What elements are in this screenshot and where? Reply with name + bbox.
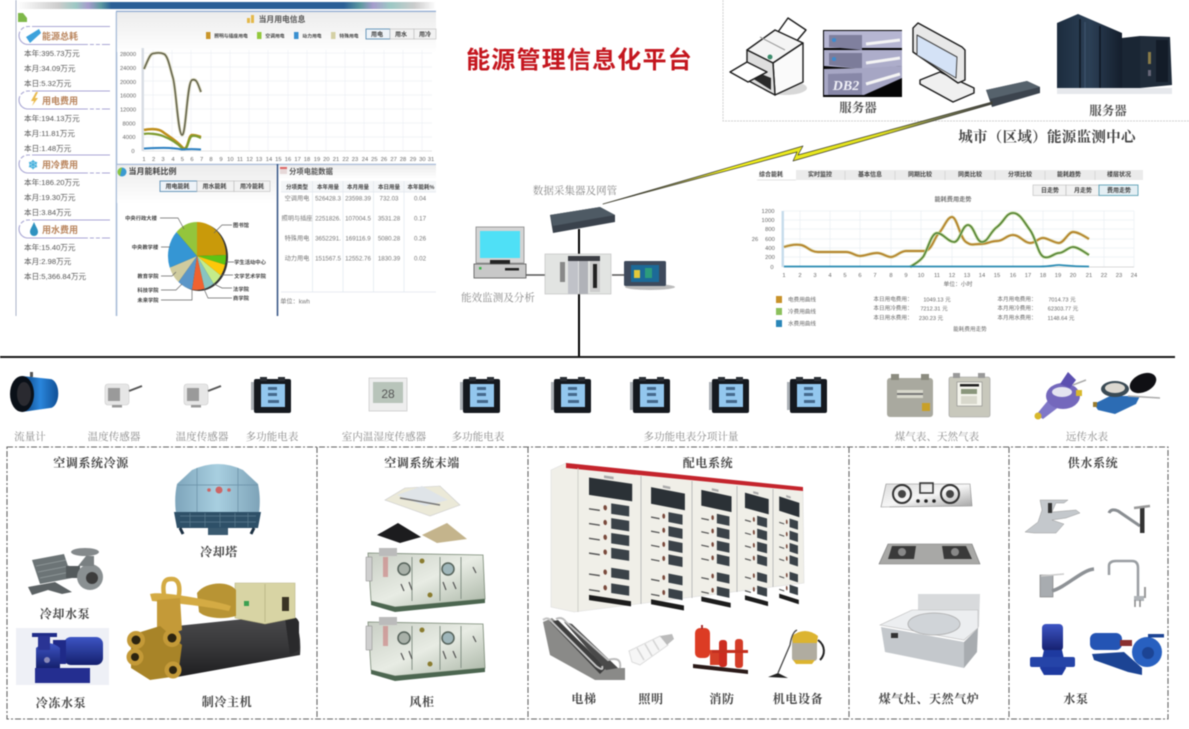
icon: two burner stove xyxy=(879,544,980,564)
panel: energy dashboard xyxy=(16,0,436,316)
tab bar: 楼层状况 xyxy=(1107,170,1131,178)
heading: sub-item electricity data: 分项电能数据 xyxy=(289,167,333,176)
data table: 空调用电 xyxy=(285,194,309,202)
line chart: cost trend: 5 xyxy=(843,273,847,279)
dashboard top strip xyxy=(17,2,436,9)
line chart: monthly electricity: 15 xyxy=(275,157,282,163)
sensor labels: 流量计 xyxy=(14,430,46,443)
line chart: cost trend: 单位：小时 xyxy=(944,280,973,288)
data table: 本日用量 xyxy=(378,183,400,191)
icon: chilled water pump xyxy=(16,628,109,685)
line chart: cost trend: 18 xyxy=(1040,273,1046,279)
data table: 5080.28 xyxy=(378,236,401,242)
line chart: monthly electricity: 12000 xyxy=(120,108,136,114)
icon: air handling unit xyxy=(366,548,485,612)
line chart: cost trend: 23 xyxy=(1116,273,1122,279)
title: 能源管理信息化平台 xyxy=(466,46,693,74)
line chart: monthly electricity: 28000 xyxy=(120,52,136,58)
line chart: monthly electricity: 6 xyxy=(190,157,194,163)
tab bar: 同期比较 xyxy=(908,170,932,178)
cost statistics: 本月用冷费用： xyxy=(997,304,1037,312)
pie chart: energy ratio: 科技学院 xyxy=(137,286,159,294)
line chart: monthly electricity: 20000 xyxy=(120,80,136,86)
icon: power meter 6 xyxy=(787,377,827,413)
line chart: monthly electricity: 9 xyxy=(219,157,223,163)
icon: room humidity sensor xyxy=(369,378,407,411)
summary: electricity cost xyxy=(19,91,110,153)
tab bar: 综合能耗 xyxy=(759,170,783,178)
tab buttons: electricity water cooling: 用水 xyxy=(395,30,407,38)
icon: three burner stove xyxy=(881,483,972,507)
trend buttons: 月走势 xyxy=(1074,186,1092,194)
summary: cooling cost: 本年:186.20万元 xyxy=(24,177,80,187)
tab buttons: ratio: 用冷能耗 xyxy=(240,182,264,190)
line chart: cost trend: 16 xyxy=(1010,273,1016,279)
data table: 0.04 xyxy=(414,196,427,202)
data table: 526428.3 xyxy=(315,196,341,202)
cost statistics: 230.23 元 xyxy=(919,315,944,322)
icon: monitor xyxy=(913,23,974,102)
data table xyxy=(281,181,436,292)
label: efficiency monitoring and analysis: 能效监测及分析 xyxy=(461,291,535,304)
icon: power meter 3 xyxy=(551,377,591,413)
icon: temperature sensor xyxy=(105,384,142,408)
switchgear cabinets xyxy=(551,463,804,612)
data table: 本年用量 xyxy=(317,183,339,191)
heading: 配电系统 xyxy=(683,455,734,470)
heading: 空调系统末端 xyxy=(384,455,460,470)
arrow: wireless link lightning xyxy=(603,102,992,204)
data table: 732.03 xyxy=(380,196,399,202)
summary: cooling cost: 用冷费用 xyxy=(42,159,78,170)
line chart: cost trend: 1 xyxy=(782,273,786,279)
cost statistics: 本日用水费用： xyxy=(873,314,913,322)
panel: AC terminal xyxy=(366,455,485,709)
cost statistics: 7212.31 元 xyxy=(920,306,948,312)
cost statistics: 7014.73 元 xyxy=(1048,296,1076,304)
pie chart: energy ratio: 文学艺术学院 xyxy=(234,272,267,280)
line chart: monthly electricity: 23 xyxy=(352,157,358,163)
summary: water cost: 本年:15.40万元 xyxy=(24,242,76,252)
icon: kitchen faucet xyxy=(1109,506,1150,533)
pie chart: energy ratio: 中央行政大楼 xyxy=(125,214,158,222)
sensor labels: 多功能电表分项计量 xyxy=(644,430,738,443)
icon: cooling tower xyxy=(174,464,261,535)
summary: total energy: 本日:5.32万元 xyxy=(24,78,72,88)
label: chiller unit: 制冷主机 xyxy=(202,694,252,709)
data table: 2251826. xyxy=(315,216,341,222)
tab bar: 同类比较 xyxy=(958,170,982,178)
icon: power meter 4 xyxy=(630,377,670,413)
summary: water cost: 本月:2.98万元 xyxy=(24,256,72,266)
icon: lever faucet xyxy=(1040,569,1094,597)
chart legend: 动力用电 xyxy=(302,32,322,40)
data table: 1830.39 xyxy=(378,256,401,262)
line chart: monthly electricity: 19 xyxy=(314,157,320,163)
label: data collector and gateway: 数据采集器及网管 xyxy=(533,184,618,197)
line chart: monthly electricity: 29 xyxy=(410,157,416,163)
line chart: monthly electricity: 28 xyxy=(400,157,406,163)
line chart: monthly electricity: 26 xyxy=(381,157,387,163)
cost legend xyxy=(776,296,816,328)
summary: water cost: 本日:5,366.84万元 xyxy=(24,271,86,281)
data table: 12552.76 xyxy=(345,256,371,262)
line chart: cost trend: 2 xyxy=(798,273,802,279)
line chart: cost trend: 4 xyxy=(828,273,832,279)
heading: monthly energy ratio xyxy=(118,166,176,176)
summary: electricity cost: 本月:11.81万元 xyxy=(24,128,75,138)
icon: horizontal water pump xyxy=(1090,633,1164,675)
cost statistics: 本月用电费用： xyxy=(997,295,1037,303)
data table: 0.26 xyxy=(414,236,427,242)
sensor labels: 煤气表、天然气表 xyxy=(895,430,980,443)
cost legend: 电费用曲线 xyxy=(788,296,816,304)
line chart: cost trend: 8 xyxy=(889,273,893,279)
line chart: monthly electricity: 20 xyxy=(323,157,330,163)
pie chart: energy ratio: 教育学院 xyxy=(137,272,159,280)
data table: 特殊用电 xyxy=(285,234,309,242)
data table: 本年能耗% xyxy=(408,183,435,191)
label: gas stove and furnace: 煤气灶、天然气炉 xyxy=(878,691,979,706)
icon: black cassette unit xyxy=(377,523,421,543)
summary: total energy: 能源总耗 xyxy=(42,30,78,42)
line chart: cost trend: 26 xyxy=(752,237,758,243)
cost statistics xyxy=(873,295,1079,333)
pie chart: energy ratio: 商学院 xyxy=(233,294,250,302)
line chart: monthly electricity: 1 xyxy=(142,157,146,163)
line chart: cost trend: 400 xyxy=(765,246,775,252)
heading: 空调系统冷源 xyxy=(53,455,129,470)
line chart: monthly electricity: 2 xyxy=(152,157,155,163)
line chart: cost trend: 9 xyxy=(904,273,908,279)
sidebar: energy summary xyxy=(19,26,110,281)
heading: monthly energy ratio: 当月能耗比例 xyxy=(128,166,176,176)
summary: electricity cost: 本年:194.13万元 xyxy=(24,113,80,123)
icon: temperature sensor 2 xyxy=(184,384,221,408)
line chart: monthly electricity: 24000 xyxy=(120,66,136,72)
summary: cooling cost xyxy=(19,155,110,217)
line chart: cost trend: 7 xyxy=(873,273,877,279)
tab bar: 分项比较 xyxy=(1008,170,1032,178)
line chart: cost trend: 200 xyxy=(765,255,775,261)
trend buttons: 日走势 xyxy=(1041,186,1059,194)
line chart: monthly electricity: 4000 xyxy=(123,135,135,141)
line chart: cost trend: 0 xyxy=(770,265,774,271)
pie chart: energy ratio: 未来学院 xyxy=(137,296,159,304)
tab buttons: ratio xyxy=(160,181,270,192)
data table: 动力用电 xyxy=(285,254,309,262)
icon: air handling unit 2 xyxy=(366,617,485,681)
icon: chart glyph xyxy=(247,15,254,23)
data table: 本月用量 xyxy=(347,183,369,191)
summary: total energy: 本月:34.09万元 xyxy=(24,63,76,73)
data table: 3531.28 xyxy=(378,216,401,222)
summary: total energy: 本年:395.73万元 xyxy=(24,48,80,58)
icon: touch panel xyxy=(624,261,675,290)
line chart: monthly electricity: 27 xyxy=(390,157,397,163)
line chart: cost trend: 10 xyxy=(918,273,924,279)
icon: analysis computer xyxy=(474,227,546,278)
sensor labels: 多功能电表 xyxy=(452,430,505,443)
label: city energy monitoring center: 城市（区域）能源监测中心 xyxy=(958,128,1138,146)
line chart: monthly electricity: 14 xyxy=(266,157,273,163)
icon: fire pump set xyxy=(693,625,748,674)
panel: equipment system frames xyxy=(7,447,1168,719)
label: cooling tower: 冷却塔 xyxy=(200,544,238,559)
cost statistics: 能耗费用走势 xyxy=(953,325,987,333)
panel: power distribution xyxy=(543,455,824,706)
icon: printer xyxy=(730,18,807,95)
sensor labels: 多功能电表 xyxy=(246,430,299,443)
line chart: cost trend: 17 xyxy=(1025,273,1031,279)
icon: power meter 5 xyxy=(709,377,749,413)
tab bar: 基本信息 xyxy=(858,170,882,178)
data table: 3652291. xyxy=(315,236,341,242)
line chart: cost trend: 13 xyxy=(964,273,970,279)
data table: 照明与插座 xyxy=(282,214,312,222)
sensor labels: 温度传感器 xyxy=(88,430,141,443)
summary: total energy xyxy=(19,26,110,88)
tab bar: 实时监控 xyxy=(808,170,832,178)
sensor labels: 室内温湿度传感器 xyxy=(342,430,427,443)
cost statistics: 1148.64 元 xyxy=(1048,315,1075,322)
icon: ceiling cassette unit xyxy=(385,486,460,516)
label: elevator: 电梯 xyxy=(571,691,597,706)
label: chilled water pump: 冷冻水泵 xyxy=(36,695,86,710)
line chart: monthly electricity xyxy=(120,48,434,163)
icon: DB2 server stack: DB2 xyxy=(832,79,859,94)
summary: cooling cost: 本日:3.84万元 xyxy=(24,207,72,217)
chart legend: 特殊用电 xyxy=(339,32,359,40)
sensor labels: 温度传感器 xyxy=(176,430,229,443)
icon: vertical water pump xyxy=(1030,624,1075,675)
pie chart: energy ratio: 图书馆 xyxy=(233,221,250,229)
icon: power meter xyxy=(251,377,291,413)
icon: smart gas meter xyxy=(949,373,990,417)
tab buttons: ratio: 用电能耗 xyxy=(165,182,190,190)
chart title: 能耗费用走势 xyxy=(934,196,972,204)
summary: cooling cost: ❄ xyxy=(28,158,38,172)
line chart: monthly electricity: 11 xyxy=(237,157,243,163)
line chart: cost trend: 12 xyxy=(949,273,955,279)
line chart: cost trend: 6 xyxy=(858,273,862,279)
chart legend: 照明与插座用电 xyxy=(214,32,248,40)
icon: network switch xyxy=(550,207,615,233)
data table: 分项类型 xyxy=(286,183,308,191)
label: AHU: 风柜 xyxy=(409,694,435,709)
icon: flow meter xyxy=(10,372,58,412)
summary: electricity cost: 用电费用 xyxy=(42,95,78,106)
icon: cooling water pump xyxy=(28,548,103,595)
chart legend xyxy=(206,32,359,40)
line chart: monthly electricity: 16000 xyxy=(120,94,136,100)
panel: gas appliances xyxy=(878,483,980,706)
heading: monthly electricity: 当月用电信息 xyxy=(259,14,306,24)
line chart: cost trend: 15 xyxy=(994,273,1000,279)
label: server 2: 服务器 xyxy=(1089,103,1127,118)
icon: chiller unit xyxy=(126,579,300,680)
sensor labels xyxy=(14,430,1109,443)
line chart: monthly electricity: 22 xyxy=(342,157,349,163)
cost statistics: 本月用水费用： xyxy=(997,314,1037,322)
row: field meters and sensors xyxy=(10,369,1160,420)
tab bar xyxy=(757,170,1143,180)
summary: water cost: 用水费用 xyxy=(42,224,78,235)
line chart: cost trend: 22 xyxy=(1101,273,1107,279)
summary: electricity cost: 本日:1.48万元 xyxy=(24,143,72,153)
line chart: monthly electricity: 8000 xyxy=(123,122,135,128)
line chart: monthly electricity: 24 xyxy=(362,157,369,163)
data table: 107004.5 xyxy=(345,216,371,222)
line chart: monthly electricity: 25 xyxy=(371,157,378,163)
label: electromechanical equipment: 机电设备 xyxy=(773,691,823,706)
tab bar: 能耗趋势 xyxy=(1057,170,1081,178)
tab buttons: electricity water cooling: 用冷 xyxy=(419,30,431,38)
icon: water meter purple xyxy=(1034,372,1086,420)
summary: cooling cost: 本月:19.30万元 xyxy=(24,192,76,202)
line chart: cost trend: 20 xyxy=(1070,273,1076,279)
pie chart: energy ratio xyxy=(125,214,267,304)
icon: network switch center xyxy=(986,81,1040,107)
label: water pump: 水泵 xyxy=(1063,691,1089,706)
unit note: 单位：kwh xyxy=(280,298,310,306)
tab buttons: electricity water cooling: 用电 xyxy=(371,30,383,38)
label: server: 服务器 xyxy=(839,100,877,115)
line chart: cost trend: 19 xyxy=(1055,273,1061,279)
icon: gas meter xyxy=(887,374,933,417)
line chart: monthly electricity: 21 xyxy=(333,157,339,163)
data table: 169116.9 xyxy=(345,236,371,242)
line chart: monthly electricity: 7 xyxy=(200,157,203,163)
cost statistics: 本日用冷费用： xyxy=(873,304,913,312)
chart legend: 空调用电 xyxy=(265,32,285,40)
label: lighting: 照明 xyxy=(638,692,664,706)
icon: power meter 2 xyxy=(460,377,500,413)
line chart: monthly electricity: 4 xyxy=(171,157,175,163)
pie chart: energy ratio: 法学院 xyxy=(233,285,250,293)
line chart: monthly electricity: 8 xyxy=(209,157,213,163)
pie chart: energy ratio: 学生活动中心 xyxy=(234,258,267,266)
label: fire protection: 消防 xyxy=(709,691,735,706)
icon: server racks xyxy=(1057,14,1172,94)
line chart: cost trend: 11 xyxy=(934,273,940,279)
icon: DB2 server stack xyxy=(823,30,902,97)
icon: water meter blue xyxy=(1093,369,1160,414)
tab buttons: electricity water cooling xyxy=(366,29,436,39)
line chart: monthly electricity: 13 xyxy=(256,157,262,163)
line chart: cost trend: 1000 xyxy=(762,218,774,224)
line chart: monthly electricity: 0 xyxy=(131,149,135,155)
line chart: cost trend: 21 xyxy=(1086,273,1092,279)
icon: folder xyxy=(18,13,27,22)
trend buttons: 费用走势 xyxy=(1107,186,1131,194)
line chart: monthly electricity: 18 xyxy=(304,157,310,163)
data table: 0.02 xyxy=(414,256,427,262)
cost legend: 水费用曲线 xyxy=(788,320,816,328)
line chart: cost trend xyxy=(752,209,1138,288)
heading: 供水系统 xyxy=(1068,455,1119,470)
icon: room humidity sensor: 28 xyxy=(381,387,395,401)
line chart: monthly electricity: 10 xyxy=(227,157,234,163)
line chart: monthly electricity: 31 xyxy=(428,157,434,163)
line chart: cost trend: 24 xyxy=(1131,273,1138,279)
pie chart: energy ratio: 中央教学楼 xyxy=(132,243,159,251)
line chart: monthly electricity: 3 xyxy=(161,157,165,163)
icon: gooseneck faucet xyxy=(1109,561,1145,607)
icon: commercial wok stove xyxy=(880,594,980,668)
icon: vacuum machine xyxy=(768,630,824,678)
data table: 23598.39 xyxy=(345,196,371,202)
line chart: cost trend: 800 xyxy=(765,227,775,233)
icon: PLC controller xyxy=(545,254,624,294)
line chart: cost trend: 1200 xyxy=(762,209,774,215)
line chart: monthly electricity: 16 xyxy=(285,157,291,163)
data table: 151567.5 xyxy=(315,256,341,262)
cost statistics: 62303.77 元 xyxy=(1048,306,1079,312)
summary: water cost xyxy=(19,220,110,281)
line chart: monthly electricity: 30 xyxy=(419,157,426,163)
cost legend: 冷费用曲线 xyxy=(788,308,816,316)
line chart: cost trend: 600 xyxy=(765,237,775,243)
icon: energy saving lamp xyxy=(629,634,674,665)
icon: beige cassette unit xyxy=(422,523,467,543)
line chart: monthly electricity: 12 xyxy=(246,157,253,163)
icon: basin faucet xyxy=(1025,500,1080,533)
cost statistics: 1049.13 元 xyxy=(923,296,951,304)
tab buttons: ratio: 用水能耗 xyxy=(202,182,227,190)
line chart: monthly electricity: 5 xyxy=(181,157,184,163)
panel: water supply xyxy=(1025,455,1164,706)
line chart: monthly electricity: 17 xyxy=(294,157,301,163)
icon: escalator xyxy=(543,618,625,680)
cost statistics: 本日用电费用： xyxy=(873,295,913,303)
sensor labels: 远传水表 xyxy=(1066,430,1109,443)
line chart: cost trend: 3 xyxy=(813,273,817,279)
panel: monitoring center xyxy=(723,0,1189,121)
data table: 0.17 xyxy=(414,216,427,222)
line chart: cost trend: 14 xyxy=(979,273,986,279)
panel: AC cooling source xyxy=(16,455,300,710)
label: cooling water pump: 冷却水泵 xyxy=(40,606,90,621)
trend buttons xyxy=(1033,185,1138,196)
dashboard: cost trend xyxy=(752,170,1143,333)
